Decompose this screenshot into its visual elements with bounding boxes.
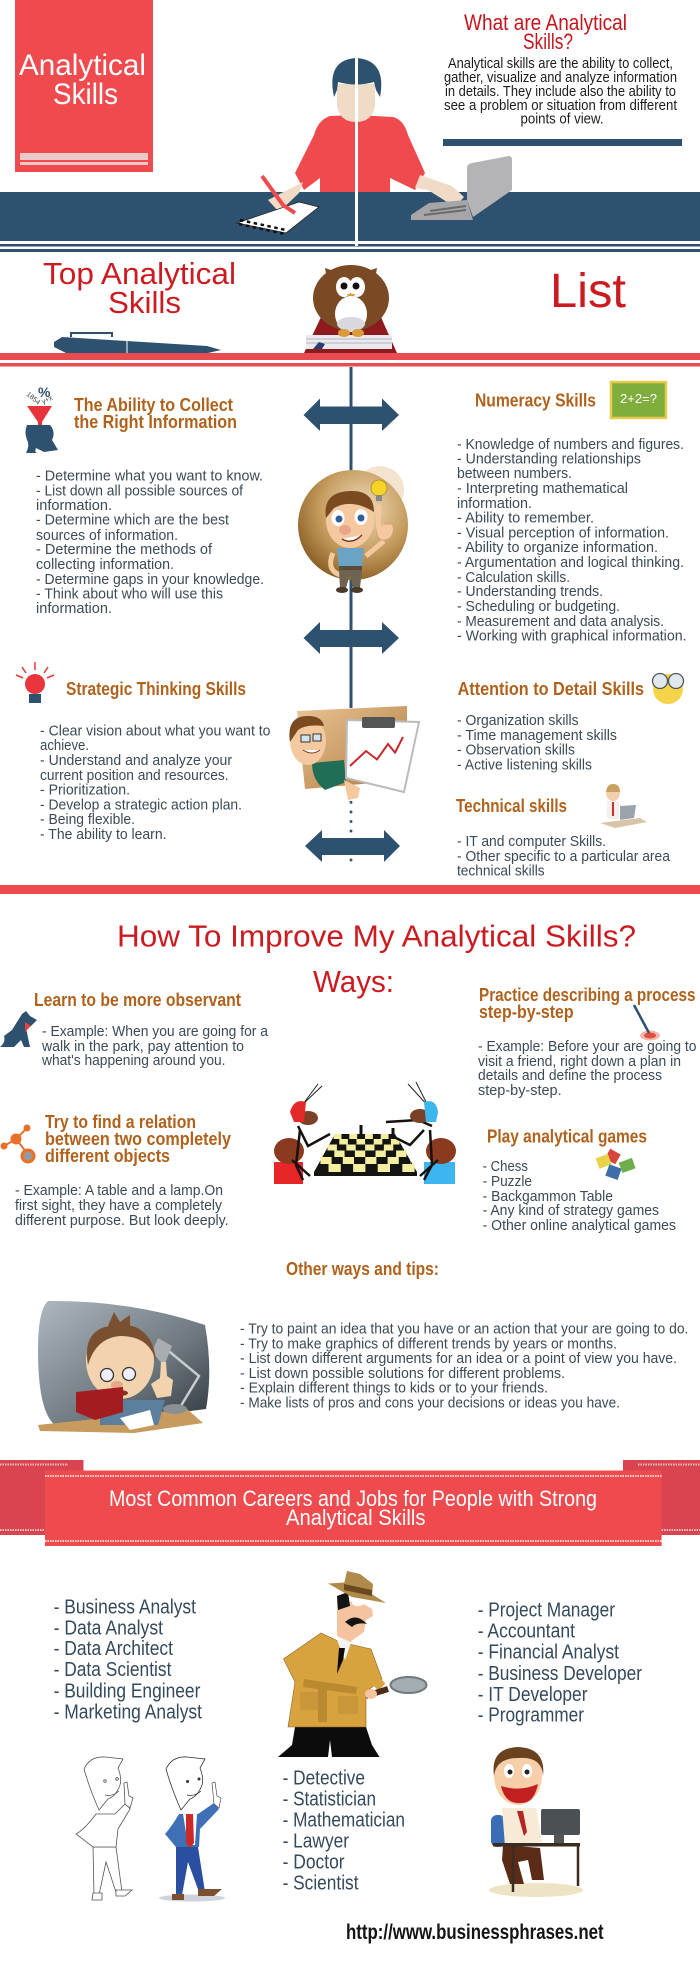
text block: strategic list: achieve. xyxy=(40,737,89,754)
arrow: first xyxy=(304,398,399,431)
heading: How To Improve My Analytical Skills?: How To Improve My Analytical Skills? xyxy=(117,918,636,953)
text block: numeracy list: - Measurement and data analysis. xyxy=(457,613,664,630)
icon: man at laptop xyxy=(600,784,647,828)
text block: numeracy list: - Argumentation and logical thinking. xyxy=(457,554,684,571)
text block: games list xyxy=(483,1158,676,1234)
text block: ability list: - Determine which are the best xyxy=(36,512,230,529)
icon: puzzle pieces xyxy=(596,1149,636,1180)
text block: detail list: - Time management skills xyxy=(457,727,617,744)
icon: notebook xyxy=(237,202,319,234)
text block: strategic list: - Being flexible. xyxy=(40,811,135,828)
text block: tips list: - Try to make graphics of different trends by years or months. xyxy=(240,1336,617,1353)
heading: The Ability to Collect the Right Information: the Right Information xyxy=(74,412,237,432)
heading: Top Analytical Skills xyxy=(43,256,236,320)
text block: ability list: information. xyxy=(36,497,112,514)
text block: careers list right: - Financial Analyst xyxy=(478,1641,619,1664)
text block: process example xyxy=(478,1038,696,1099)
title panel: Analytical Skills xyxy=(15,0,153,172)
icon: pen and target xyxy=(634,1005,660,1040)
arrow: third xyxy=(305,830,400,862)
text block: careers list right: - Project Manager xyxy=(478,1599,615,1622)
icon: light bulb xyxy=(371,480,387,501)
title panel: Analytical Skills: Skills xyxy=(53,78,118,111)
illustration: man reading by lamp xyxy=(38,1301,209,1433)
heading: Play analytical games: Play analytical games xyxy=(487,1126,647,1146)
text block: definition: points of view. xyxy=(520,110,604,128)
icon: funnel and head: 1854 xyxy=(25,391,41,407)
text block: careers list right: - Programmer xyxy=(478,1704,584,1727)
text block: relation example: different purpose. But look deeply. xyxy=(15,1212,229,1229)
text block: careers list middle: - Scientist xyxy=(283,1872,359,1894)
icon: chalkboard xyxy=(611,382,666,418)
text block: observant example: - Example: When you are going for a xyxy=(42,1023,269,1040)
arrow: second xyxy=(304,622,399,654)
text block: careers list left xyxy=(54,1595,202,1723)
heading: Numeracy Skills: Numeracy Skills xyxy=(475,390,596,410)
icon: network nodes xyxy=(0,1124,34,1162)
text block: numeracy list: - Visual perception of information. xyxy=(457,524,669,541)
navy bar under definition xyxy=(443,139,682,146)
text block: ability list: sources of information. xyxy=(36,527,178,544)
icon: owl on book xyxy=(304,265,397,353)
text block: careers list left: - Data Analyst xyxy=(54,1616,163,1639)
text block: careers list middle: - Lawyer xyxy=(283,1830,349,1853)
icon: laptop xyxy=(411,156,512,220)
text block: ability list xyxy=(36,468,264,617)
text block: careers list left: - Business Analyst xyxy=(54,1595,196,1618)
title panel: Analytical Skills: Analytical xyxy=(19,49,146,82)
text block: careers list middle: - Detective xyxy=(283,1766,365,1790)
illustration: outline man pointing xyxy=(76,1757,133,1900)
icon: funnel and head xyxy=(25,384,58,453)
divider: red bands xyxy=(0,353,700,366)
heading: Learn to be more observant: Learn to be more observant xyxy=(34,990,241,1010)
right ant xyxy=(386,1082,456,1180)
text block: strategic list: - Prioritization. xyxy=(40,782,130,799)
heading: Attention to Detail Skills: Attention to Detail Skills xyxy=(458,679,644,699)
illustration: ants playing chess xyxy=(274,1082,456,1184)
heading: Practice describing a process step-by-step: step-by-step xyxy=(479,1002,574,1022)
text block: tips list: - Make lists of pros and cons your decisions or ideas you have. xyxy=(240,1394,620,1412)
text block: tips list xyxy=(240,1321,688,1412)
banner title xyxy=(109,1486,597,1530)
text block: ability list: - List down all possible sources of xyxy=(36,482,244,499)
text block: tips list: - Explain different things to kids or to your friends. xyxy=(240,1380,548,1396)
heading: List: List xyxy=(550,265,626,318)
text block: games list: - Other online analytical games xyxy=(483,1217,676,1234)
icon: red pen xyxy=(262,176,295,213)
text block: careers list left: - Marketing Analyst xyxy=(54,1700,202,1723)
text block: ability list: collecting information. xyxy=(36,556,174,573)
heading: Other ways and tips: Other ways and tips: xyxy=(286,1259,439,1279)
text block: ability list: - Determine gaps in your knowledge. xyxy=(36,571,264,588)
heading: What are Analytical Skills?: What are Analytical xyxy=(464,10,627,35)
heading: Ways: Ways: xyxy=(313,964,394,999)
icon: funnel and head: y+x xyxy=(41,395,54,406)
text block: technical list: - IT and computer Skills. xyxy=(457,833,606,850)
icon: navy pen xyxy=(54,333,221,353)
heading: Try to find a relation: different objects xyxy=(45,1146,170,1166)
text block: careers list middle xyxy=(283,1766,405,1894)
heading: Strategic Thinking Skills: Strategic Thinking Skills xyxy=(66,679,246,699)
heading: Try to find a relation: between two completely xyxy=(45,1129,231,1149)
text block: definition xyxy=(444,55,678,128)
text block: ability list: - Think about who will use this xyxy=(36,586,223,603)
text block: process example: details and define the process xyxy=(478,1067,662,1084)
heading: Technical skills: Technical skills xyxy=(456,796,567,816)
text block: numeracy list: - Scheduling or budgeting. xyxy=(457,598,620,615)
text block: observant example: walk in the park, pay attention to xyxy=(41,1038,244,1055)
text block: numeracy list xyxy=(457,436,687,645)
text block: strategic list xyxy=(40,722,270,843)
text block: observant example xyxy=(41,1023,269,1069)
banner: careers ribbon xyxy=(0,1460,700,1546)
illustration: idea man in gold circle xyxy=(298,466,408,593)
text block: careers list left: - Building Engineer xyxy=(54,1680,201,1702)
illustration: man with clipboard chart xyxy=(289,706,419,800)
heading: Try to find a relation xyxy=(45,1112,231,1166)
timeline line with arrows xyxy=(304,367,400,866)
text block: numeracy list: - Calculation skills. xyxy=(457,569,570,586)
illustration: coloured man pointing xyxy=(159,1757,225,1902)
text block: games list: - Backgammon Table xyxy=(483,1188,613,1205)
text block: detail list: - Active listening skills xyxy=(457,756,592,773)
text block: numeracy list: - Understanding trends. xyxy=(457,583,603,600)
illustration: person at desk xyxy=(237,58,512,246)
text block: strategic list: current position and resources. xyxy=(40,767,229,784)
text block: numeracy list: - Ability to remember. xyxy=(457,510,594,526)
desk band xyxy=(0,192,700,252)
text block: strategic list: - Clear vision about what you want to xyxy=(40,722,270,739)
text block: technical list: - Other specific to a particular area xyxy=(457,848,671,865)
text block: ability list: - Determine the methods of xyxy=(36,541,213,558)
chess board xyxy=(314,1125,417,1176)
text block: tips list: - List down different arguments for an idea or a point of view you have. xyxy=(240,1350,677,1367)
text block: detail list: - Observation skills xyxy=(457,742,575,759)
text block: tips list: - List down possible solutions for different problems. xyxy=(240,1365,565,1382)
text block: games list: - Any kind of strategy games xyxy=(483,1202,659,1219)
url footer: http://www.businessphrases.net xyxy=(346,1921,604,1944)
text block: process example: step-by-step. xyxy=(478,1082,562,1099)
text block: numeracy list: - Knowledge of numbers and figures. xyxy=(457,436,684,453)
text block: ability list: information. xyxy=(36,600,112,617)
text block: ability list: - Determine what you want to know. xyxy=(36,468,263,484)
heading: Top Analytical Skills: Top Analytical xyxy=(43,256,236,291)
text block: relation example: first sight, they have a completely xyxy=(15,1197,222,1214)
text block: technical list xyxy=(457,833,671,880)
text block: numeracy list: - Working with graphical information. xyxy=(457,628,687,645)
text block: games list: - Puzzle xyxy=(483,1173,532,1190)
text block: numeracy list: - Understanding relationships xyxy=(457,451,641,468)
text block: careers list left: - Data Scientist xyxy=(54,1658,172,1681)
text block: numeracy list: information. xyxy=(457,495,532,512)
heading: What are Analytical Skills? xyxy=(464,10,627,54)
divider: red band xyxy=(0,885,700,894)
text block: careers list middle: - Statistician xyxy=(283,1787,376,1810)
heading: Top Analytical Skills: Skills xyxy=(108,285,181,320)
text block: careers list left: - Data Architect xyxy=(54,1637,173,1660)
heading: What are Analytical Skills?: Skills? xyxy=(523,29,573,54)
icon: smiley with glasses xyxy=(652,674,684,704)
left ant xyxy=(274,1084,330,1180)
text block: numeracy list: between numbers. xyxy=(457,465,572,482)
text block: detail list: - Organization skills xyxy=(457,712,579,729)
text block: strategic list: - Understand and analyze your xyxy=(40,752,232,769)
icon: sitting dog xyxy=(0,1011,37,1047)
text block: games list: - Chess xyxy=(483,1158,528,1175)
icon: chalkboard: 2+2=? xyxy=(620,391,657,406)
text block: numeracy list: - Ability to organize information. xyxy=(457,539,658,556)
text block: careers list right: - Accountant xyxy=(478,1620,575,1643)
text block: technical list: technical skills xyxy=(457,862,545,880)
text block: detail list xyxy=(457,712,617,773)
heading: The Ability to Collect the Right Information: The Ability to Collect xyxy=(74,395,233,415)
heading: Try to find a relation: Try to find a relation xyxy=(45,1112,196,1132)
text block: careers list middle: - Doctor xyxy=(283,1851,345,1874)
text block: strategic list: - The ability to learn. xyxy=(40,826,166,843)
text block: process example: visit a friend, right down a plan in xyxy=(478,1053,681,1070)
text block: careers list right: - IT Developer xyxy=(478,1683,588,1706)
illustration: detective xyxy=(278,1571,426,1757)
text block: careers list right xyxy=(478,1599,642,1727)
text block: careers list middle: - Mathematician xyxy=(283,1808,405,1831)
text block: relation example xyxy=(15,1182,229,1229)
banner title: Most Common Careers and Jobs for People with Strong xyxy=(109,1486,597,1511)
heading: Practice describing a process step-by-step xyxy=(479,985,696,1022)
illustration: office worker at desk xyxy=(489,1747,583,1897)
text block: numeracy list: - Interpreting mathematical xyxy=(457,480,628,497)
heading: The Ability to Collect the Right Information xyxy=(74,395,237,432)
banner title: Analytical Skills xyxy=(286,1505,426,1530)
text block: careers list right: - Business Developer xyxy=(478,1662,642,1685)
text block: strategic list: - Develop a strategic action plan. xyxy=(40,796,242,813)
text block: observant example: what's happening around you. xyxy=(41,1052,226,1069)
text block: relation example: - Example: A table and a lamp.On xyxy=(15,1182,223,1199)
icon: funnel and head: % xyxy=(38,384,51,400)
icon: red light bulb xyxy=(16,662,54,703)
